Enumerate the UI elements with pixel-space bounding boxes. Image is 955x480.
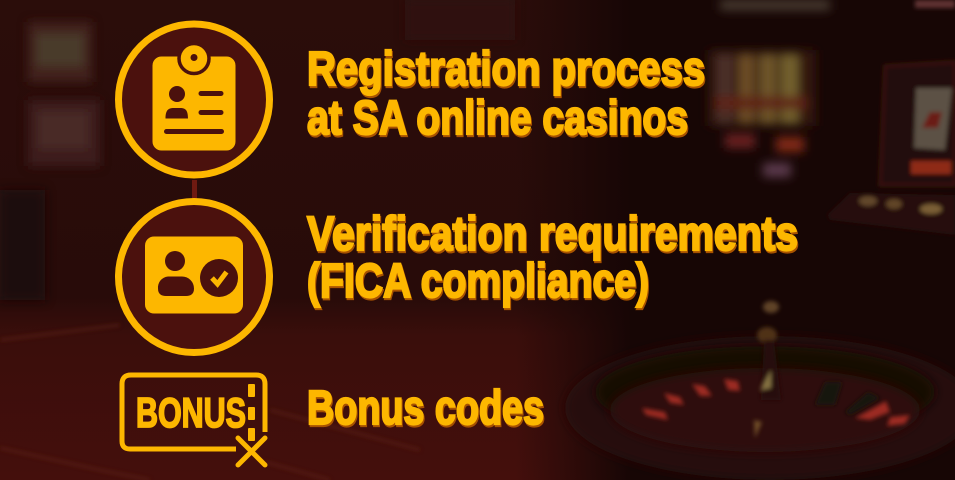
centre slot machine xyxy=(708,0,830,177)
heading: verification requirements: (FICA compliance) xyxy=(307,255,649,308)
icon: registration clipboard xyxy=(118,24,270,175)
icon: bonus ticket xyxy=(122,375,265,465)
left slot machines xyxy=(0,0,515,300)
roulette wheel xyxy=(565,301,955,480)
icon: bonus ticket: BONUS xyxy=(136,389,246,436)
right slot machine xyxy=(827,0,955,235)
heading: verification requirements: Verification requirements xyxy=(307,208,798,261)
wheel turret xyxy=(754,301,781,438)
connector between icons xyxy=(192,180,197,204)
icon: verified ID card xyxy=(118,202,270,352)
heading: registration process: at SA online casinos xyxy=(307,92,688,145)
heading: registration process: Registration process xyxy=(307,43,705,96)
heading: verification requirements xyxy=(307,208,798,308)
heading: bonus codes: Bonus codes xyxy=(307,382,544,435)
felt table lines xyxy=(0,325,420,480)
heading: registration process xyxy=(307,43,705,145)
